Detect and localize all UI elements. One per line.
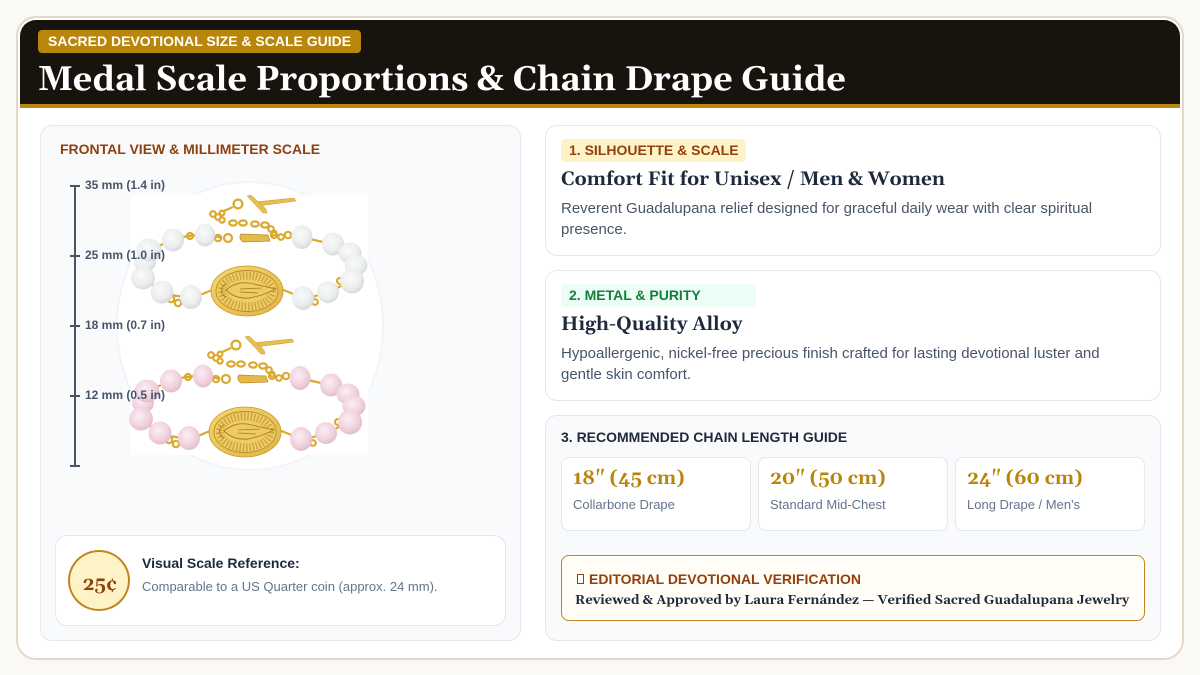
- verification callout: [561, 555, 1145, 621]
- panel: metal and purity: [545, 270, 1161, 401]
- visual scale reference card: [55, 535, 506, 626]
- description: silhouette: presence.: [561, 221, 627, 238]
- panel: chain length guide: [545, 415, 1161, 641]
- chain option: 20 inch: 20" (50 cm): [770, 467, 886, 491]
- white pearl bracelet: [131, 195, 368, 316]
- description: silhouette: [561, 200, 1092, 238]
- icon: quarter coin: 25¢: [83, 573, 117, 597]
- description: metal: gentle skin comfort.: [561, 366, 691, 383]
- white image: bracelet photo: [131, 195, 368, 455]
- panel: silhouette and scale: [545, 125, 1161, 256]
- white circle backdrop: [116, 181, 384, 471]
- chain option: 18 inch: Collarbone Drape: [573, 497, 675, 512]
- verification heading: EDITORIAL DEVOTIONAL VERIFICATION: [589, 571, 861, 587]
- badge: silhouette: 1. SILHOUETTE & SCALE: [569, 142, 739, 158]
- chain option: 24 inch: Long Drape / Men's: [967, 497, 1080, 512]
- heading: comfort fit: Comfort Fit for Unisex / Men & Women: [561, 168, 945, 192]
- scale label: 25 mm: 25 mm (1.0 in): [85, 248, 165, 262]
- scale reference text: Comparable to a US Quarter coin (approx. 24 mm).: [142, 579, 438, 594]
- chain option: 24 inch: [955, 457, 1145, 531]
- chain option: 18 inch: 18" (45 cm): [573, 467, 685, 491]
- panel: frontal view and scale: [40, 125, 521, 641]
- header badge: [38, 30, 361, 53]
- chain option: 20 inch: Standard Mid-Chest: [770, 497, 886, 512]
- scale label: 35 mm: 35 mm (1.4 in): [85, 178, 165, 192]
- header band: [20, 20, 1180, 108]
- icon: quarter coin: [68, 550, 130, 611]
- scale reference heading: Visual Scale Reference:: [142, 555, 300, 571]
- heading: high-quality alloy: High-Quality Alloy: [561, 313, 742, 337]
- chain guide heading: 3. RECOMMENDED CHAIN LENGTH GUIDE: [561, 429, 847, 445]
- scale label: 18 mm: 18 mm (0.7 in): [85, 318, 165, 332]
- description: silhouette: Reverent Guadalupana relief designed for graceful daily wear with clear spiritual: [561, 200, 1092, 217]
- vertical millimeter ruler: [70, 185, 80, 467]
- title: Medal Scale Proportions & Chain Drape Guide: [38, 58, 846, 102]
- panel heading: frontal view: FRONTAL VIEW & MILLIMETER SCALE: [60, 141, 320, 157]
- badge: silhouette: [561, 139, 746, 162]
- pink bead bracelet: [129, 336, 366, 457]
- badge: metal: 2. METAL & PURITY: [569, 287, 701, 303]
- description: metal: Hypoallergenic, nickel-free precious finish crafted for lasting devotional luster and: [561, 345, 1100, 362]
- badge: metal: [561, 284, 756, 307]
- description: metal: [561, 345, 1100, 383]
- chain option: 24 inch: 24" (60 cm): [967, 467, 1083, 491]
- chain option: 18 inch: [561, 457, 751, 531]
- header badge: SACRED DEVOTIONAL SIZE & SCALE GUIDE: [48, 33, 351, 49]
- verification statement: Reviewed & Approved by Laura Fernández — Verified Sacred Guadalupana Jewelry: [575, 593, 1129, 609]
- chain option: 20 inch: [758, 457, 948, 531]
- icon: missing-glyph box: [577, 574, 584, 584]
- scale label: 12 mm: 12 mm (0.5 in): [85, 388, 165, 402]
